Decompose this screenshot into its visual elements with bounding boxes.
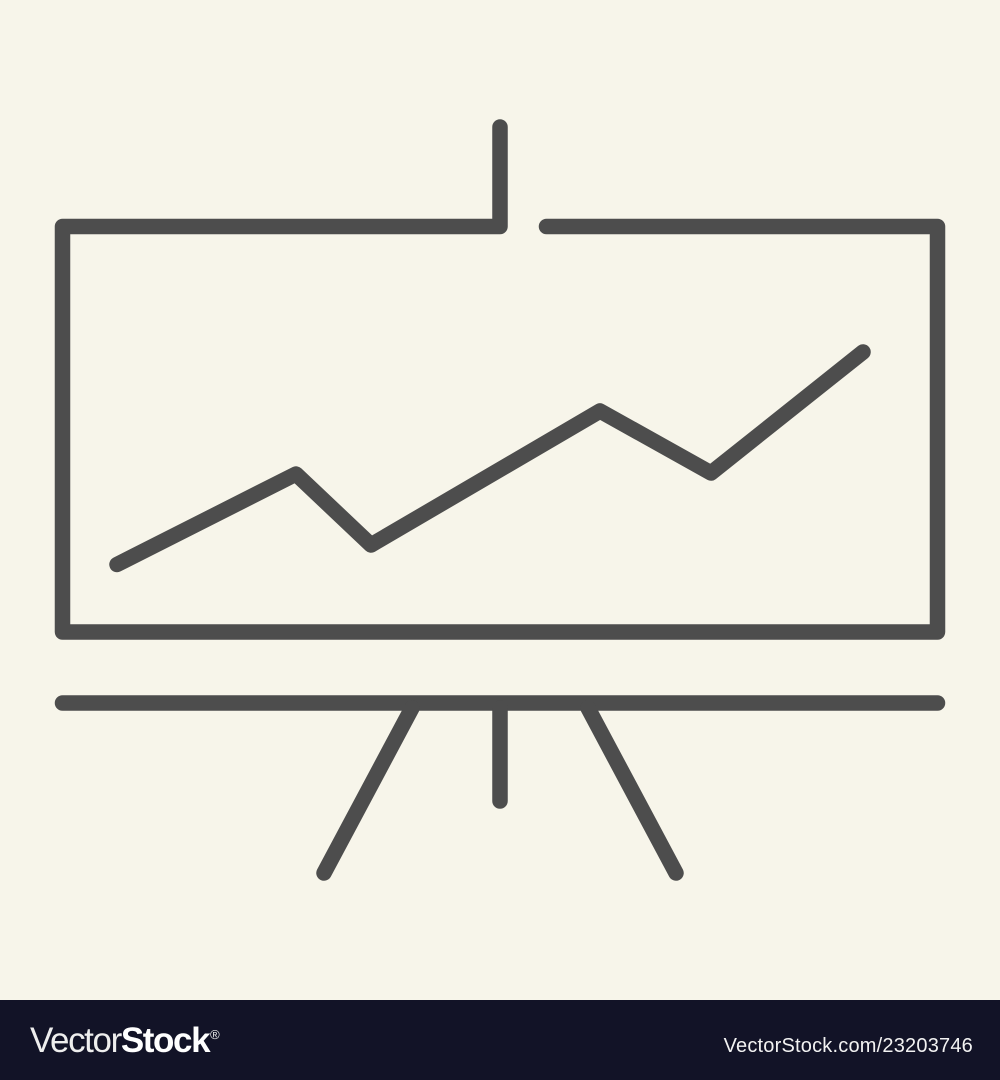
rising line chart bbox=[117, 352, 863, 564]
watermark footer bar bbox=[0, 1000, 1000, 1080]
image URL: VectorStock.com/23203746 bbox=[724, 1035, 973, 1057]
board frame bbox=[62, 127, 938, 632]
easel stand bbox=[62, 703, 938, 873]
VectorStock logo: VectorStock® bbox=[30, 1021, 220, 1060]
